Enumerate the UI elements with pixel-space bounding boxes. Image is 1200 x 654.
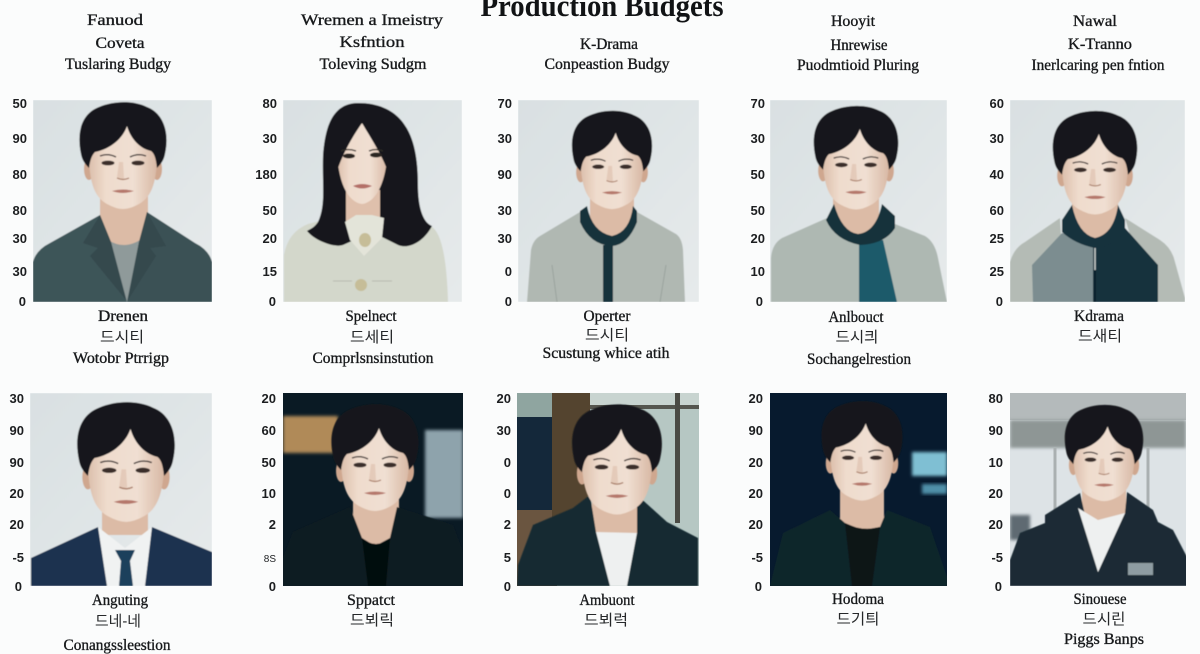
card heading: column 2: Toleving Sudgm <box>320 56 427 73</box>
caption: row 1 column 3: 드시티 <box>585 327 629 344</box>
caption: row 1 column 2 <box>312 308 434 367</box>
portrait: man in dark green blazer <box>33 100 212 302</box>
axis: row 1 column 3 <box>498 96 512 309</box>
axis: row 1 column 4 <box>751 96 765 309</box>
portrait: man in dark puffer jacket, office background <box>517 393 699 586</box>
axis: row 1 column 2: 80 <box>263 96 277 111</box>
axis: row 2 column 5: 10 <box>989 455 1003 470</box>
axis: row 1 column 5 <box>990 96 1004 309</box>
caption: row 2 column 4 <box>832 591 884 628</box>
axis: row 2 column 1: 90 <box>10 455 24 470</box>
axis: row 1 column 3: 0 <box>505 264 512 279</box>
caption: row 2 column 2: Sppatct <box>347 592 396 609</box>
caption: row 2 column 3: 드뵈럭 <box>584 612 628 629</box>
portrait: man in black hoodie, bright office <box>1010 393 1187 586</box>
card heading: column 3: Conpeastion Budgy <box>544 56 670 73</box>
caption: row 1 column 3: Scustung whice atih <box>542 345 670 362</box>
axis: row 2 column 3: 30 <box>497 423 511 438</box>
card heading: column 2 <box>301 12 443 73</box>
axis: row 1 column 3: 30 <box>498 131 512 146</box>
axis: row 2 column 1 <box>10 391 24 594</box>
axis: row 1 column 3: 30 <box>498 203 512 218</box>
caption: row 1 column 4: 드시킈 <box>836 329 878 346</box>
card heading: column 2: Wremen a Imeistry <box>301 12 443 29</box>
caption: row 1 column 4 <box>807 309 911 368</box>
axis: row 2 column 1: -5 <box>12 550 24 565</box>
caption: row 1 column 1: Drenen <box>98 308 148 325</box>
caption: row 1 column 1: 드시티 <box>100 329 144 346</box>
axis: row 2 column 3: 5 <box>504 550 511 565</box>
axis: row 1 column 4: 50 <box>751 167 765 182</box>
axis: row 2 column 3: 0 <box>504 455 511 470</box>
caption: row 1 column 5 <box>1074 308 1124 345</box>
axis: row 2 column 2: 8S <box>264 554 276 565</box>
axis: row 2 column 1: 0 <box>15 579 22 594</box>
caption: row 2 column 1: Conangssleestion <box>64 637 170 654</box>
axis: row 1 column 3: 70 <box>498 96 512 111</box>
caption: row 2 column 5: 드시린 <box>1082 611 1126 628</box>
card heading: column 3 <box>544 36 670 73</box>
axis: row 1 column 2: 30 <box>263 131 277 146</box>
caption: row 2 column 3: Ambuont <box>580 592 635 609</box>
axis: row 2 column 5: -5 <box>991 550 1003 565</box>
caption: row 1 column 5: Kdrama <box>1074 308 1124 325</box>
axis: row 2 column 4: 20 <box>749 455 763 470</box>
axis: row 2 column 3 <box>497 391 511 594</box>
axis: row 2 column 4 <box>749 391 763 594</box>
axis: row 2 column 3: 2 <box>504 517 511 532</box>
axis: row 1 column 1: 80 <box>13 167 27 182</box>
axis: row 1 column 5: 25 <box>990 231 1004 246</box>
axis: row 1 column 1: 50 <box>13 96 27 111</box>
caption: row 1 column 4: Sochangelrestion <box>807 351 911 368</box>
caption: row 1 column 4: Anlbouct <box>828 309 884 326</box>
axis: row 1 column 4: 30 <box>751 131 765 146</box>
caption: row 2 column 3 <box>580 592 635 629</box>
caption: row 2 column 5: Piggs Banps <box>1064 631 1144 648</box>
portrait: woman with long dark hair in cream jacket <box>283 100 462 302</box>
card heading: column 5: Nawal <box>1073 13 1118 30</box>
axis: row 1 column 4: 50 <box>751 203 765 218</box>
axis: row 1 column 1: 30 <box>13 231 27 246</box>
portrait: man in black jacket, dark room with orange box <box>283 393 463 586</box>
caption: row 1 column 2: Spelnect <box>346 308 397 325</box>
axis: row 2 column 5: 20 <box>989 517 1003 532</box>
portrait: man in dark jacket, navy background <box>770 393 947 586</box>
card heading: column 3: K-Drama <box>580 36 638 53</box>
axis: row 1 column 1 <box>13 96 27 309</box>
axis: row 1 column 4: 10 <box>751 264 765 279</box>
caption: row 2 column 4: 드기틔 <box>836 611 880 628</box>
axis: row 2 column 2: 2 <box>269 517 276 532</box>
axis: row 1 column 3: 0 <box>505 294 512 309</box>
card heading: column 4: Hnrewise <box>830 37 888 54</box>
axis: row 2 column 4: 90 <box>749 423 763 438</box>
axis: row 2 column 4: 20 <box>749 391 763 406</box>
axis: row 1 column 5: 40 <box>990 167 1004 182</box>
axis: row 2 column 5: 0 <box>995 579 1002 594</box>
card heading: column 5 <box>1032 13 1164 74</box>
caption: row 1 column 3: Operter <box>584 308 631 325</box>
axis: row 2 column 5: 20 <box>989 486 1003 501</box>
caption: row 2 column 5: Sinouese <box>1074 591 1126 608</box>
axis: row 2 column 2: 60 <box>262 423 276 438</box>
axis: row 1 column 1: 80 <box>13 203 27 218</box>
axis: row 2 column 1: 30 <box>10 391 24 406</box>
axis: row 1 column 4: 0 <box>756 294 763 309</box>
axis: row 2 column 4: 20 <box>749 517 763 532</box>
card heading: column 4: Puodmtioid Pluring <box>797 57 919 74</box>
portrait: man in grey and navy zip jacket <box>1010 100 1185 302</box>
axis: row 2 column 2: 50 <box>262 455 276 470</box>
caption: row 2 column 1 <box>64 592 170 654</box>
caption: row 1 column 1 <box>73 308 169 367</box>
axis: row 1 column 2: 15 <box>263 264 277 279</box>
card heading: column 1: Fanuod <box>87 12 143 29</box>
card heading: column 5: K-Tranno <box>1068 36 1132 53</box>
axis: row 2 column 5: 90 <box>989 423 1003 438</box>
axis: row 1 column 5: 25 <box>990 264 1004 279</box>
caption: row 1 column 2: 드세티 <box>350 329 394 346</box>
axis: row 2 column 3: 0 <box>504 486 511 501</box>
axis: row 1 column 5: 60 <box>990 203 1004 218</box>
card heading: column 5: Inerlcaring pen fntion <box>1032 57 1164 74</box>
portrait: man in navy suit and tie <box>30 393 212 586</box>
card heading: column 2: Ksfntion <box>340 34 404 51</box>
axis: row 1 column 5: 0 <box>996 294 1003 309</box>
axis: row 2 column 2 <box>262 391 276 594</box>
caption: row 2 column 1: 드네-네 <box>95 613 141 630</box>
portrait: man in grey cardigan with dark collar <box>518 100 699 302</box>
caption: row 1 column 5: 드새티 <box>1078 328 1122 345</box>
axis: row 2 column 3: 0 <box>504 579 511 594</box>
axis: row 1 column 5: 30 <box>990 131 1004 146</box>
axis: row 1 column 4: 20 <box>751 231 765 246</box>
caption: row 1 column 3 <box>542 308 670 362</box>
caption: row 2 column 5 <box>1064 591 1144 648</box>
axis: row 1 column 2: 180 <box>255 167 277 182</box>
axis: row 2 column 2: 0 <box>269 579 276 594</box>
axis: row 1 column 3: 30 <box>498 231 512 246</box>
caption: row 2 column 2 <box>347 592 396 629</box>
axis: row 2 column 4: -5 <box>751 550 763 565</box>
axis: row 1 column 2: 0 <box>269 294 276 309</box>
axis: row 2 column 4: 20 <box>749 486 763 501</box>
card heading: column 4 <box>797 13 919 74</box>
caption: row 2 column 4: Hodoma <box>832 591 884 608</box>
card heading: column 1 <box>65 12 171 73</box>
axis: row 1 column 2 <box>255 96 277 309</box>
card heading: column 4: Hooyit <box>831 13 876 30</box>
axis: row 1 column 4: 70 <box>751 96 765 111</box>
portrait: man in grey jacket with teal shirt <box>770 100 947 302</box>
axis: row 2 column 1: 20 <box>10 486 24 501</box>
axis: row 1 column 2: 20 <box>263 231 277 246</box>
axis: row 1 column 5: 60 <box>990 96 1004 111</box>
axis: row 1 column 1: 30 <box>13 264 27 279</box>
axis: row 1 column 1: 90 <box>13 131 27 146</box>
axis: row 2 column 2: 10 <box>262 486 276 501</box>
axis: row 2 column 3: 20 <box>497 391 511 406</box>
axis: row 2 column 2: 20 <box>262 391 276 406</box>
caption: row 1 column 2: Comprlsnsinstution <box>312 350 434 367</box>
caption: row 2 column 1: Anguting <box>92 592 148 609</box>
axis: row 1 column 1: 0 <box>19 294 26 309</box>
caption: row 1 column 1: Wotobr Ptrrigp <box>73 350 169 367</box>
axis: row 2 column 5: 80 <box>989 391 1003 406</box>
card heading: column 1: Tuslaring Budgy <box>65 56 171 73</box>
caption: row 2 column 2: 드뵈릭 <box>350 612 394 629</box>
axis: row 2 column 1: 20 <box>10 517 24 532</box>
card heading: column 1: Coveta <box>96 35 144 52</box>
axis: row 2 column 5 <box>989 391 1003 594</box>
axis: row 1 column 3: 90 <box>498 167 512 182</box>
axis: row 2 column 1: 90 <box>10 423 24 438</box>
axis: row 1 column 2: 50 <box>263 203 277 218</box>
axis: row 2 column 4: 0 <box>755 579 762 594</box>
